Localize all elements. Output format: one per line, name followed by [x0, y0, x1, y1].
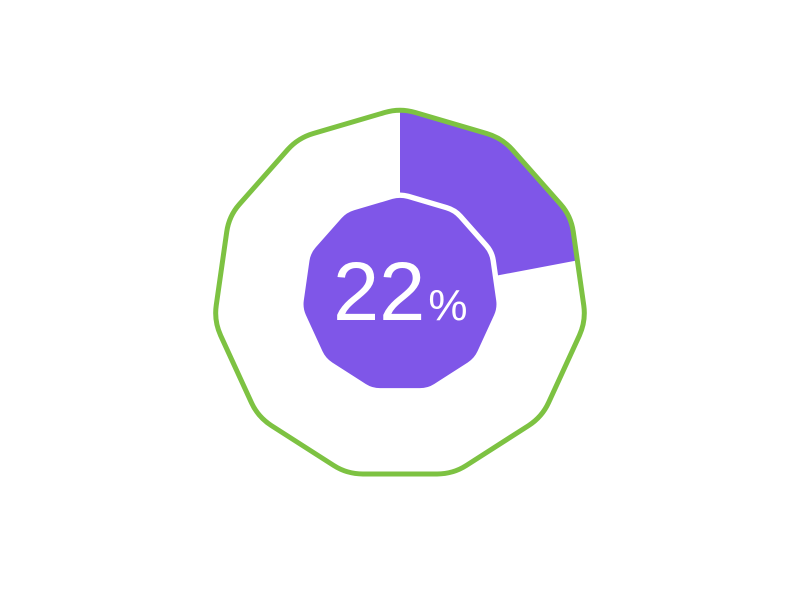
value text: 22%: 22%	[333, 245, 467, 338]
outer green outline	[216, 110, 584, 474]
inner polygon with value	[301, 195, 499, 391]
wedge: 22% segment	[400, 112, 575, 276]
chart: polygon percentage ring	[213, 108, 587, 476]
